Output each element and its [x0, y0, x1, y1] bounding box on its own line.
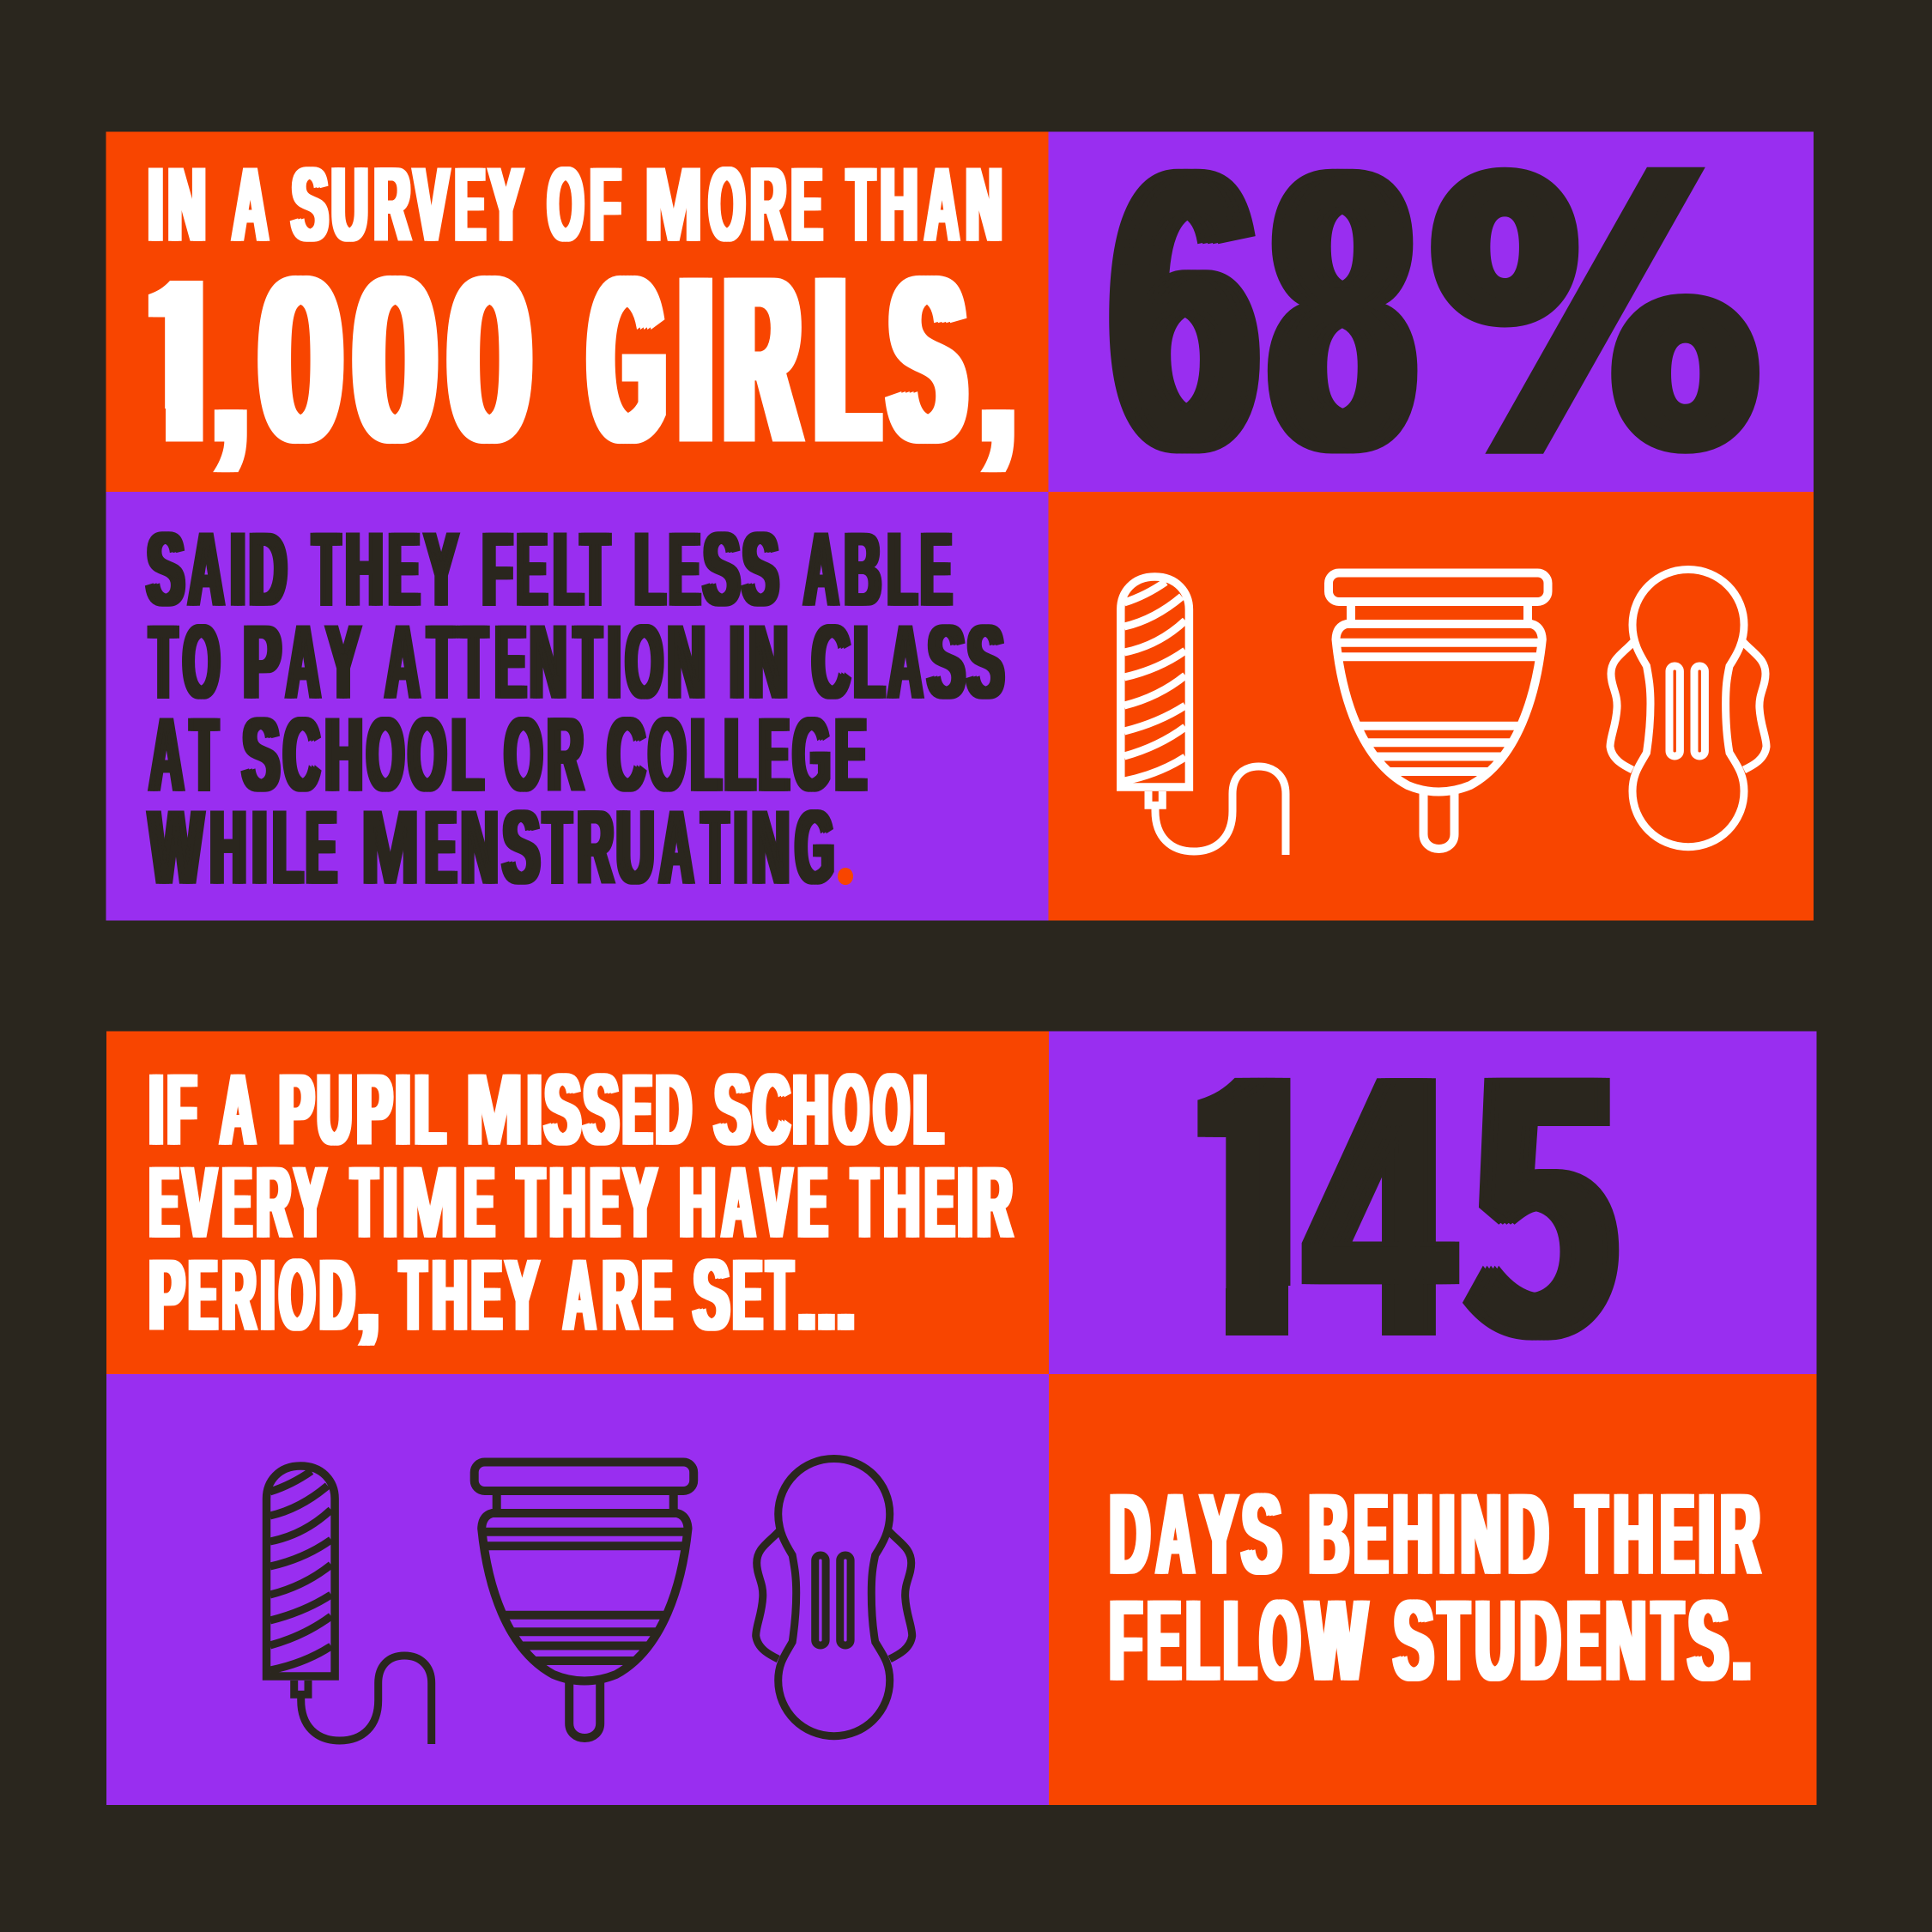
text block: said they felt less able: Y [425, 511, 457, 627]
heading: in a survey of more than: F [591, 146, 621, 263]
panel: 68 percent (purple) [1049, 132, 1814, 492]
heading: in a survey of more than: H [881, 146, 918, 263]
text block: if a pupil missed school: O [874, 1053, 909, 1166]
text block: if a pupil missed school: H [884, 1146, 919, 1258]
text block: if a pupil missed school: I [384, 1146, 397, 1258]
heading: in a survey of more than: A [233, 146, 267, 263]
text block: said they felt less able: S [742, 511, 778, 627]
text block: said they felt less able: A [189, 511, 224, 627]
text block: days behind their fellow students: N [1461, 1471, 1501, 1598]
text block: if a pupil missed school: E [464, 1146, 494, 1258]
text block: said they felt less able: B [845, 511, 881, 627]
text block: said they felt less able: L [854, 603, 885, 720]
text block: if a pupil missed school: M [402, 1146, 458, 1258]
text block: if a pupil missed school: S [715, 1053, 750, 1166]
text block: if a pupil missed school: . [818, 1239, 835, 1351]
text block: said they felt less able: S [243, 696, 280, 813]
text block: said they felt less able: E [425, 789, 457, 905]
text block: said they felt less able: E [921, 511, 952, 627]
text block: if a pupil missed school: E [798, 1146, 827, 1258]
text block: if a pupil missed school: D [656, 1053, 691, 1166]
text block: if a pupil missed school: T [400, 1239, 426, 1351]
text block: said they felt less able: A [888, 603, 923, 720]
text block: said they felt less able: M [361, 789, 419, 905]
big number: 145: 1 [1192, 927, 1316, 1434]
heading: in a survey of more than: U [331, 146, 367, 263]
text block: days behind their fellow students: Y [1201, 1471, 1238, 1598]
text block: if a pupil missed school: I [261, 1239, 275, 1351]
text block: if a pupil missed school: T [351, 1146, 378, 1258]
text block: said they felt less able: A [659, 789, 693, 905]
text block: if a pupil missed school: S [545, 1053, 580, 1166]
text block: days behind their fellow students: D [1110, 1471, 1150, 1598]
text block: said they felt less able: E [669, 511, 700, 627]
text block: if a pupil missed school: S [584, 1053, 618, 1166]
text block: if a pupil missed school: P [149, 1239, 185, 1351]
text block: days behind their fellow students: D [1520, 1578, 1560, 1705]
heading: in a survey of more than: S [292, 146, 328, 263]
text block: said they felt less able: E [388, 511, 420, 627]
text block: if a pupil missed school: E [591, 1146, 620, 1258]
text block: if a pupil missed school: Y [624, 1146, 656, 1258]
text block: said they felt less able: W [149, 789, 203, 905]
heading: in a survey of more than: O [709, 146, 745, 263]
text block: if a pupil missed school: I [149, 1053, 163, 1166]
heading: in a survey of more than: M [645, 146, 702, 263]
heading: 1,000 girls: , [976, 262, 1020, 482]
text block: days behind their fellow students: H [1614, 1471, 1653, 1598]
text block: if a pupil missed school: C [754, 1053, 790, 1166]
text block: if a pupil missed school: . [798, 1239, 815, 1351]
text block: if a pupil missed school: S [693, 1239, 730, 1351]
big number: 68 percent: % [1430, 112, 1760, 522]
text block: days behind their fellow students: A [1156, 1471, 1194, 1598]
text block: said they felt less able: C [608, 696, 645, 813]
text block: said they felt less able: O [649, 696, 686, 813]
text block: said they felt less able: A [385, 603, 420, 720]
text block: said they felt less able: T [460, 603, 488, 720]
icon: tampon [1121, 577, 1286, 855]
text block: said they felt less able: S [928, 603, 965, 720]
heading: 1,000 girls: 0 [446, 228, 533, 490]
text block: said they felt less able: S [147, 511, 185, 627]
text block: days behind their fellow students: S [1394, 1578, 1433, 1705]
text block: said they felt less able: P [244, 603, 281, 720]
big number: 68 percent: 8 [1271, 91, 1414, 531]
text block: if a pupil missed school: O [833, 1053, 869, 1166]
text block: said they felt less able: U [616, 789, 654, 905]
text block: if a pupil missed school: F [167, 1053, 197, 1166]
panel: days behind (orange) [1049, 1374, 1816, 1805]
heading: 1,000 girls: L [816, 228, 878, 490]
text block: if a pupil missed school: I [958, 1146, 972, 1258]
panel: 145 number (purple) [1049, 1032, 1816, 1374]
text block: said they felt less able: S [704, 511, 740, 627]
text block: said they felt less able: A [149, 696, 184, 813]
text block: said they felt less able: C [283, 696, 319, 813]
text block: said they felt less able: L [634, 511, 665, 627]
text block: if a pupil missed school: P [357, 1053, 392, 1166]
text block: said they felt less able: A [804, 511, 839, 627]
text block: if a pupil missed school: H [433, 1239, 467, 1351]
panel: missed school intro (orange) [106, 1032, 1049, 1374]
text block: if a pupil missed school [149, 1053, 1012, 1351]
heading: 1,000 girls: 1 [145, 185, 218, 504]
text block: days behind their fellow students: T [1438, 1578, 1469, 1705]
heading: in a survey of more than: N [168, 146, 206, 263]
heading: 1,000 girls [145, 185, 1020, 504]
big number: 145: 5 [1466, 927, 1624, 1434]
text block: days behind their fellow students: I [1439, 1471, 1455, 1598]
text block: if a pupil missed school: Y [294, 1146, 325, 1258]
text block: if a pupil missed school: A [221, 1053, 254, 1166]
text block: said they felt less able: T [427, 603, 456, 720]
heading: in a survey of more than: E [791, 146, 822, 263]
heading: in a survey of more than: R [750, 146, 786, 263]
text block: said they felt less able: L [273, 789, 303, 905]
text block: if a pupil missed school: E [733, 1239, 762, 1351]
text block: said they felt less able: O [626, 603, 663, 720]
heading: in a survey of more than: E [455, 146, 486, 263]
text block: said they felt less able: L [554, 511, 584, 627]
text block: said they felt less able: I [231, 511, 245, 627]
text block: days behind their fellow students: T [1652, 1578, 1683, 1705]
text block: said they felt less able: O [366, 696, 404, 813]
panel: survey intro (orange) [106, 132, 1049, 492]
text block: said they felt less able: E [835, 696, 867, 813]
text block: said they felt less able: N [530, 603, 566, 720]
text block: said they felt less able: E [759, 696, 790, 813]
text block: if a pupil missed school: M [466, 1053, 523, 1166]
heading: 1,000 girls: 0 [352, 228, 439, 490]
text block: said they felt less able: H [346, 511, 383, 627]
text block: if a pupil missed school: E [622, 1053, 652, 1166]
heading: 1,000 girls: 0 [257, 228, 344, 490]
text: R [978, 1146, 1012, 1258]
text block: if a pupil missed school: E [222, 1146, 251, 1258]
text block: days behind their fellow students: L [1186, 1578, 1219, 1705]
text block: said they felt less able: H [210, 789, 246, 905]
icon: tampon [267, 1466, 432, 1744]
text block: said they felt less able: O [183, 603, 220, 720]
text block: days behind their fellow students: S [1242, 1471, 1281, 1598]
text block: if a pupil missed school: . [838, 1239, 855, 1351]
text block: if a pupil missed school: L [913, 1053, 943, 1166]
text block: days behind their fellow students: W [1306, 1578, 1366, 1705]
text block: days behind their fellow students: T [1576, 1471, 1607, 1598]
text block: said they felt less able: H [325, 696, 362, 813]
text block: said they felt less able: O [409, 696, 446, 813]
text block: if a pupil missed school: R [603, 1239, 638, 1351]
heading: 1,000 girls: I [681, 228, 711, 490]
text block: days behind their fellow students: L [1223, 1578, 1257, 1705]
icon: menstrual cup [1329, 573, 1548, 849]
heading: in a survey of more than: T [847, 146, 875, 263]
heading: in a survey of more than: R [374, 146, 410, 263]
text block: said they felt less able: R [578, 789, 614, 905]
heading: 1,000 girls: G [590, 228, 664, 490]
icon: sanitary pad [1610, 570, 1766, 847]
text block: said they felt less able: N [749, 603, 788, 720]
text block: said they felt less able: E [495, 603, 526, 720]
icon: sanitary pad [756, 1459, 912, 1736]
text block: days behind their fellow students: E [1566, 1578, 1600, 1705]
text block: said they felt less able: S [503, 789, 540, 905]
text block: if a pupil missed school: E [925, 1146, 954, 1258]
panel: product icons (orange) [1049, 492, 1814, 920]
big number: 68 percent [1111, 91, 1760, 531]
text block: days behind their fellow students [1110, 1471, 1759, 1705]
heading: 1,000 girls: , [209, 262, 252, 482]
text block: said they felt less able: L [724, 696, 755, 813]
big number: 68 percent: 6 [1111, 91, 1257, 531]
text block: days behind their fellow students: B [1309, 1471, 1349, 1598]
text block: said they felt less able: C [812, 603, 850, 720]
text block: said they felt less able: T [543, 789, 572, 905]
text block: if a pupil missed school: T [518, 1146, 544, 1258]
text block: said they felt less able: R [548, 696, 584, 813]
text block: if a pupil missed school: A [564, 1239, 596, 1351]
text block: if a pupil missed school: H [549, 1146, 585, 1258]
text block: said they felt less able: T [191, 696, 218, 813]
text block: said they felt less able: E [306, 789, 336, 905]
big number: 145: 4 [1308, 1002, 1452, 1411]
text block: said they felt less able: G [796, 789, 834, 905]
text block: if a pupil missed school: Y [506, 1239, 538, 1351]
text block: said they felt less able: T [149, 603, 177, 720]
heading: in a survey of more than: Y [489, 146, 522, 263]
text block: said they felt less able: T [574, 603, 602, 720]
heading: 1,000 girls: S [891, 228, 965, 490]
text block: if a pupil missed school: H [680, 1146, 715, 1258]
text block: said they felt less able: T [312, 511, 340, 627]
heading: in a survey of more than: O [548, 146, 584, 263]
text block: days behind their fellow students: S [1688, 1578, 1729, 1705]
panel: less able statement (purple) [106, 492, 1049, 920]
text block: days behind their fellow students: . [1732, 1578, 1751, 1705]
text block: said they felt less able: N [668, 603, 706, 720]
text block: if a pupil missed school: T [766, 1239, 793, 1351]
text block: days behind their fellow students: E [1660, 1471, 1694, 1598]
text block: said they felt less able: L [887, 511, 917, 627]
text block: if a pupil missed school: O [280, 1239, 315, 1351]
text block: if a pupil missed school: D [319, 1239, 354, 1351]
text block: said they felt less able: E [517, 511, 548, 627]
text block: said they felt less able: L [451, 696, 482, 813]
text block: said they felt less able: I [608, 603, 621, 720]
text block: said they felt less able: N [461, 789, 498, 905]
text block: said they felt less able [147, 511, 1003, 905]
text block: if a pupil missed school: V [761, 1146, 791, 1258]
text: R [1720, 1471, 1759, 1598]
text: N [966, 146, 1002, 263]
panel: product icons (purple) [106, 1374, 1049, 1805]
icon: menstrual cup [475, 1463, 693, 1738]
text block: said they felt less able: I [730, 603, 744, 720]
text block: if a pupil missed school: R [222, 1239, 256, 1351]
text block: if a pupil missed school: E [149, 1146, 179, 1258]
text block: days behind their fellow students: I [1699, 1471, 1715, 1598]
text block: said they felt less able: A [287, 603, 320, 720]
text block: days behind their fellow students: D [1508, 1471, 1548, 1598]
text block: if a pupil missed school: L [415, 1053, 445, 1166]
text block: said they felt less able: D [249, 511, 287, 627]
heading: in a survey of more than: V [415, 146, 449, 263]
text block: if a pupil missed school: T [851, 1146, 878, 1258]
text block: said they felt less able: F [482, 511, 512, 627]
text block: if a pupil missed school: R [257, 1146, 291, 1258]
text block: if a pupil missed school: U [318, 1053, 352, 1166]
icon set: tampon, cup and pad (dark) [267, 1459, 912, 1744]
heading: 1,000 girls: R [725, 228, 799, 490]
heading: in a survey of more than: A [925, 146, 959, 263]
text block: if a pupil missed school: A [722, 1146, 755, 1258]
text block: days behind their fellow students: E [1354, 1471, 1388, 1598]
text block: said they felt less able: T [702, 789, 728, 905]
text block: said they felt less able: I [734, 789, 748, 905]
text block: if a pupil missed school: V [184, 1146, 216, 1258]
big number: 145 [1197, 1078, 1619, 1341]
text block: days behind their fellow students: E [1147, 1578, 1181, 1705]
text block: if a pupil missed school: H [793, 1053, 828, 1166]
text block: if a pupil missed school: E [471, 1239, 501, 1351]
text block: if a pupil missed school: P [280, 1053, 314, 1166]
text block: days behind their fellow students: F [1110, 1578, 1142, 1705]
heading: in a survey of more than: I [148, 146, 163, 263]
text block: if a pupil missed school: E [189, 1239, 217, 1351]
icon set: tampon, cup and pad (white) [1121, 570, 1766, 855]
text block: if a pupil missed school: I [396, 1053, 410, 1166]
text block: said they felt less able: O [505, 696, 542, 813]
text block: said they felt less able: S [967, 603, 1004, 720]
text block: said they felt less able: T [581, 511, 609, 627]
text block: days behind their fellow students: N [1606, 1578, 1646, 1705]
text block: days behind their fellow students: U [1475, 1578, 1515, 1705]
text block: if a pupil missed school: , [358, 1239, 379, 1351]
orange full stop [838, 868, 853, 885]
text block: if a pupil missed school: E [642, 1239, 672, 1351]
text block: said they felt less able: G [793, 696, 830, 813]
text block: days behind their fellow students: H [1393, 1471, 1432, 1598]
text block: said they felt less able: Y [326, 603, 360, 720]
text block: days behind their fellow students: O [1260, 1578, 1300, 1705]
text block: said they felt less able: L [691, 696, 721, 813]
text block: said they felt less able: N [752, 789, 790, 905]
text block: said they felt less able: I [252, 789, 267, 905]
text block: if a pupil missed school: I [528, 1053, 542, 1166]
